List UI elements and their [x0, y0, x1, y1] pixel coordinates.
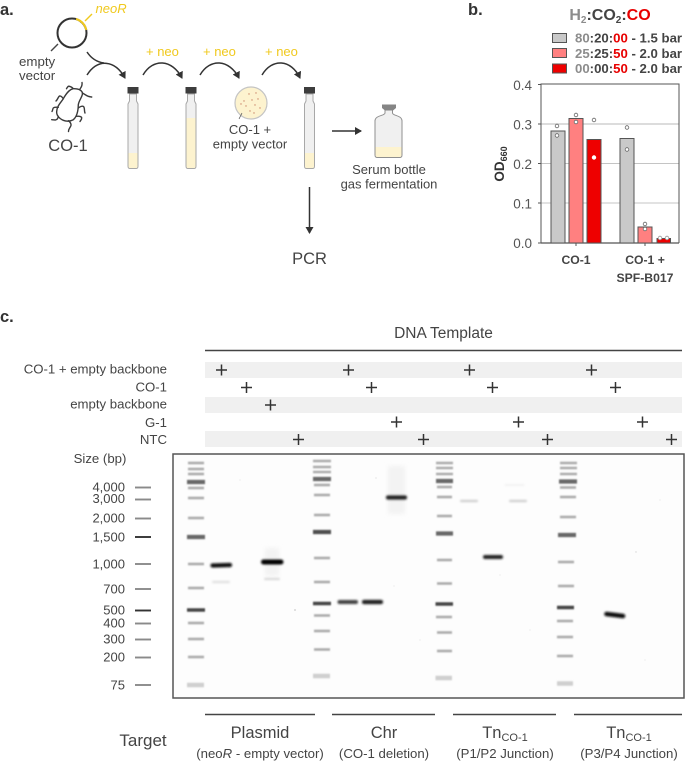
panel: b bar chart: [468, 1, 682, 285]
arrow: to PCR: [308, 187, 310, 233]
size labels: 500: [103, 602, 125, 618]
+ neo labels: + neo: [203, 44, 236, 59]
arrow: to serum bottle: [332, 130, 361, 132]
size labels: 1,000: [92, 556, 125, 572]
ladder lane 4: [557, 463, 577, 684]
target: Tn P1/P2: (P1/P2 Junction): [456, 746, 554, 761]
legend: 25:25:50 - 2.0 bar: [575, 46, 682, 61]
legend: [552, 30, 682, 76]
panel label c: c.: [0, 308, 14, 326]
size axis title: Size (bp): [74, 451, 126, 466]
ladder lane 2: [313, 461, 331, 676]
template row labels: NTC: [140, 432, 167, 447]
target: chr: [339, 724, 429, 761]
size labels: 1,500: [92, 530, 125, 544]
gel specks: [240, 477, 660, 660]
target: chr: (CO-1 deletion): [339, 746, 429, 761]
target: Tn P1/P2: CO-1: [501, 732, 528, 744]
template row labels: CO-1: [135, 380, 167, 394]
PCR label: PCR: [292, 250, 327, 268]
target: Tn P3/P4: Tn: [606, 724, 625, 742]
Target heading: Target: [119, 731, 167, 750]
legend: 80:20:00 - 1.5 bar: [575, 30, 682, 46]
CO-1 label: CO-1: [48, 137, 88, 155]
panel label b: b.: [468, 1, 483, 19]
gas mix title: :CO: [586, 7, 616, 24]
gas mix title: H: [569, 7, 587, 26]
size labels: [92, 480, 125, 692]
+ neo labels: [146, 44, 298, 59]
template row labels: [24, 362, 167, 447]
template row labels: CO-1 + empty backbone: [24, 362, 167, 376]
target: Tn P3/P4: [580, 724, 678, 761]
panel label a: a.: [0, 1, 14, 19]
size labels: 2,000: [92, 510, 125, 526]
empty vector label: vector: [19, 68, 56, 83]
panel: a workflow: [0, 1, 437, 268]
size labels: 4,000: [92, 480, 125, 494]
x axis labels: CO-1 +: [625, 253, 665, 267]
plate label: CO-1 +: [229, 122, 271, 137]
size labels: 400: [103, 616, 125, 630]
size markers: [135, 488, 151, 685]
icon: culture tube 1: [128, 87, 138, 168]
icon: culture tube 2: [186, 87, 196, 168]
target: plasmid: Plasmid: [231, 724, 289, 742]
x axis labels: SPF-B017: [617, 271, 674, 285]
bars: [551, 118, 670, 243]
y axis tick labels: [513, 78, 532, 251]
icon: culture tube 3: [304, 87, 315, 168]
target: plasmid: (neoR - empty vector): [196, 746, 324, 761]
template row labels: empty backbone: [70, 396, 167, 412]
template bracket: [205, 350, 682, 352]
plus signs: [216, 364, 677, 445]
gas mix title: :: [621, 7, 627, 24]
gel image: [173, 454, 684, 698]
icon: empty vector plasmid: [51, 14, 92, 51]
panel: c gel: [0, 308, 684, 761]
y axis tick labels: 0.3: [513, 118, 532, 132]
gas mix title: 2: [616, 15, 622, 26]
gas mix title: CO: [627, 7, 651, 24]
y axis title: OD: [492, 161, 507, 182]
plate label: empty vector: [213, 136, 288, 152]
y axis title: 660: [499, 146, 509, 161]
serum bottle label: gas fermentation: [341, 176, 437, 192]
neoR label: neoR: [96, 1, 127, 16]
y axis tick labels: 0.2: [513, 157, 532, 172]
x axis labels: [561, 253, 674, 285]
chart grid and axes: [538, 84, 679, 246]
target: plasmid: [196, 724, 324, 761]
serum bottle label: Serum bottle: [352, 162, 426, 177]
target: chr: Chr: [371, 724, 398, 742]
y axis tick labels: 0.4: [513, 78, 532, 93]
gas mix title: 2: [581, 15, 587, 26]
size labels: 75: [111, 678, 125, 692]
icon: serum bottle: [375, 104, 402, 158]
arrows: culture transfers: [87, 52, 300, 78]
size labels: 700: [103, 582, 125, 596]
+ neo labels: + neo: [146, 44, 179, 59]
target brackets: [205, 714, 682, 716]
y axis tick labels: 0.1: [513, 196, 532, 212]
target: Tn P3/P4: (P3/P4 Junction): [580, 746, 678, 761]
template row labels: G-1: [145, 415, 167, 430]
x axis labels: CO-1: [561, 253, 591, 267]
data points: [555, 113, 669, 240]
ladder lane 3: [436, 463, 453, 678]
size labels: 3,000: [92, 491, 125, 506]
+ neo labels: + neo: [265, 44, 298, 59]
size labels: 200: [103, 650, 125, 664]
sample bands: [212, 485, 623, 616]
icon: agar plate with colonies: [235, 87, 267, 119]
legend: 00:00:50 - 2.0 bar: [575, 61, 682, 76]
target: Tn P1/P2: Tn: [482, 724, 501, 742]
target: Tn P1/P2: [456, 724, 554, 761]
template row stripes: [205, 362, 682, 447]
ladder lane 1: [187, 463, 205, 685]
target: Tn P3/P4: CO-1: [625, 732, 652, 744]
y axis tick labels: 0.0: [513, 236, 532, 251]
empty vector label: empty: [19, 54, 55, 69]
smears behind bands: [265, 466, 405, 576]
DNA template heading: DNA Template: [394, 325, 493, 342]
size labels: 300: [103, 632, 125, 646]
icon: CO-1 bacterium: [52, 82, 92, 132]
